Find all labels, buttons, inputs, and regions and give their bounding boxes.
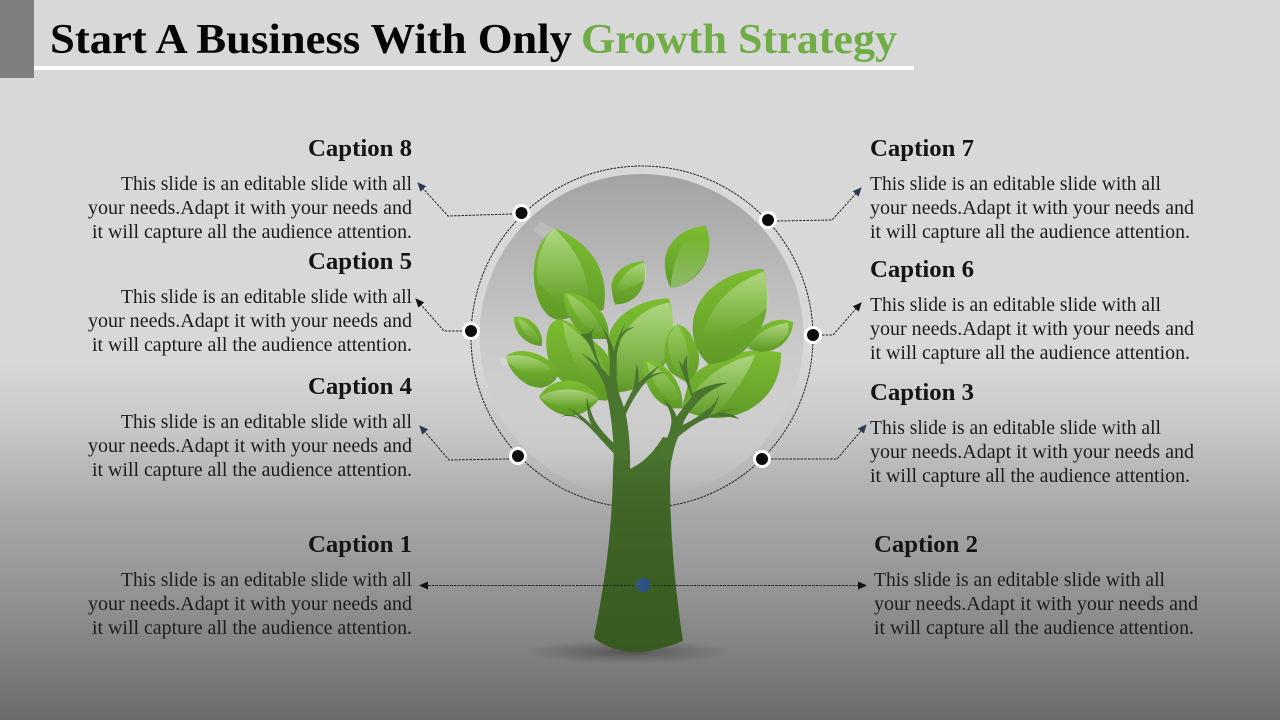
heading: Caption 8 — [308, 136, 412, 162]
panel: caption 4 — [88, 374, 412, 481]
leaf — [748, 320, 793, 352]
leaf — [514, 317, 542, 346]
panel: caption 7 — [870, 136, 1194, 243]
leaf — [608, 298, 674, 393]
connector: caption 6 arrow — [822, 303, 861, 335]
body text — [88, 286, 412, 356]
body text — [874, 569, 1198, 639]
body text: This slide is an editable slide with all — [870, 417, 1161, 439]
leaf — [533, 221, 605, 320]
body text: it will capture all the audience attention. — [870, 342, 1190, 364]
marker dot: caption 7 — [760, 212, 776, 228]
leaf — [665, 226, 709, 288]
leaf — [546, 319, 613, 401]
body text: This slide is an editable slide with all — [121, 411, 412, 433]
branches — [561, 323, 739, 460]
connector: caption 2 arrow — [653, 584, 866, 586]
panel: caption 2 — [874, 532, 1198, 639]
marker dot: caption 6 — [806, 328, 820, 342]
connector: caption 4 arrow — [420, 426, 509, 460]
title underline — [34, 66, 914, 70]
leaf — [539, 381, 599, 416]
body text — [88, 173, 412, 243]
panel: caption 6 — [870, 257, 1194, 364]
body text: This slide is an editable slide with all — [121, 569, 412, 591]
tree crown — [498, 221, 793, 460]
panel: caption 8 — [88, 136, 412, 243]
body text: your needs.Adapt it with your needs and — [870, 318, 1194, 340]
body text: it will capture all the audience attention. — [92, 459, 412, 481]
body text: it will capture all the audience attention. — [870, 465, 1190, 487]
body text: your needs.Adapt it with your needs and — [88, 310, 412, 332]
body text: your needs.Adapt it with your needs and — [870, 197, 1194, 219]
body text: it will capture all the audience attention. — [874, 617, 1194, 639]
heading: Caption 1 — [308, 532, 412, 558]
heading: Caption 7 — [870, 136, 974, 162]
body text: your needs.Adapt it with your needs and — [874, 593, 1198, 615]
leaf — [693, 269, 768, 364]
title accent block — [0, 0, 34, 78]
title: Growth Strategy — [581, 17, 897, 63]
body text: This slide is an editable slide with all — [121, 173, 412, 195]
connector: caption 3 arrow — [771, 425, 866, 459]
connector: caption 7 arrow — [777, 188, 861, 221]
leaf — [564, 293, 609, 339]
leaf — [644, 360, 683, 408]
dashed ring — [471, 166, 813, 508]
heading: Caption 5 — [308, 249, 412, 275]
heading: Caption 4 — [308, 374, 412, 400]
marker dot: caption 5 — [464, 324, 478, 338]
panel: caption 3 — [870, 380, 1194, 487]
leaf — [612, 261, 647, 304]
leaf — [498, 351, 560, 388]
body text: This slide is an editable slide with all — [874, 569, 1165, 591]
marker dot: caption 3 — [754, 452, 770, 466]
body text: your needs.Adapt it with your needs and — [88, 435, 412, 457]
marker dot: caption 4 — [510, 448, 526, 464]
leaf — [665, 324, 699, 382]
body text — [870, 173, 1194, 243]
body text: it will capture all the audience attention. — [870, 221, 1190, 243]
tree trunk — [594, 437, 683, 652]
glass circle — [480, 174, 804, 498]
connector: caption 1 arrow — [420, 584, 634, 586]
panel: caption 1 — [88, 532, 412, 639]
body text: it will capture all the audience attention. — [92, 221, 412, 243]
body text — [88, 411, 412, 481]
body text: This slide is an editable slide with all — [870, 173, 1161, 195]
body text — [88, 569, 412, 639]
body text: your needs.Adapt it with your needs and — [88, 197, 412, 219]
panel: tree diagram — [471, 166, 813, 664]
ground shadow — [523, 640, 733, 664]
heading: Caption 3 — [870, 380, 974, 406]
title: Start A Business With Only — [50, 17, 572, 63]
connector: caption 8 arrow — [418, 183, 512, 216]
title — [50, 17, 897, 63]
marker dot: trunk centre — [636, 578, 650, 592]
body text: your needs.Adapt it with your needs and — [870, 441, 1194, 463]
body text — [870, 417, 1194, 487]
body text: your needs.Adapt it with your needs and — [88, 593, 412, 615]
body text: it will capture all the audience attention. — [92, 334, 412, 356]
body text — [870, 294, 1194, 364]
heading: Caption 2 — [874, 532, 978, 558]
leaf — [682, 351, 781, 418]
heading: Caption 6 — [870, 257, 974, 283]
body text: This slide is an editable slide with all — [121, 286, 412, 308]
panel: caption 5 — [88, 249, 412, 356]
body text: This slide is an editable slide with all — [870, 294, 1161, 316]
marker dot: caption 8 — [514, 206, 529, 220]
body text: it will capture all the audience attention. — [92, 617, 412, 639]
connector: caption 5 arrow — [416, 299, 462, 331]
